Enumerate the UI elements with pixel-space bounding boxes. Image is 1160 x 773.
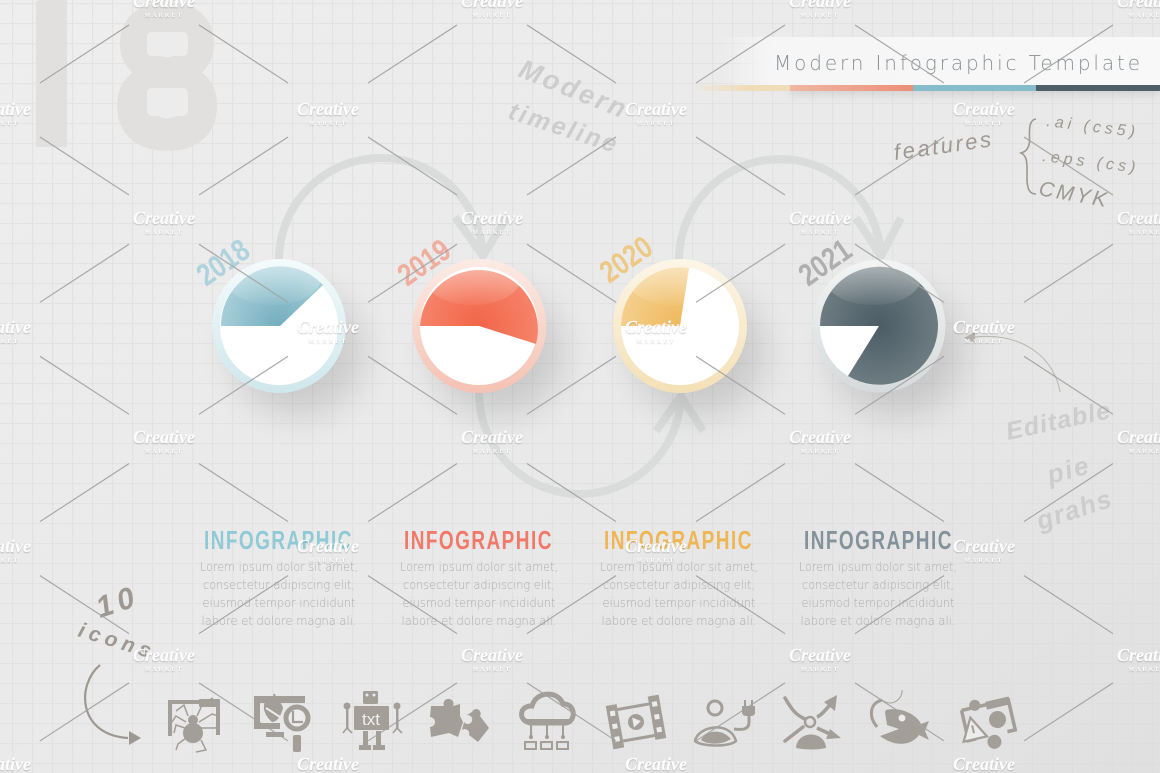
- watermark logos: MARKET: [472, 667, 512, 673]
- text block 2021: consectetur adipiscing elit,: [802, 578, 954, 592]
- watermark logos: MARKET: [964, 558, 1004, 564]
- handwritten note: features: [892, 113, 1140, 212]
- year label 2019: 2019: [391, 232, 457, 293]
- watermark logos: Creative: [625, 536, 687, 556]
- watermark logos: Creative: [625, 99, 687, 119]
- icon: person with plug: [695, 700, 755, 746]
- watermark logos: MARKET: [636, 558, 676, 564]
- handwritten note: modern timeline: [505, 54, 633, 159]
- text block 2020: Lorem ipsum dolor sit amet,: [600, 560, 758, 574]
- text block 2018: consectetur adipiscing elit,: [203, 578, 355, 592]
- watermark logos: MARKET: [144, 13, 184, 19]
- arrow: 2019 to 2020: [479, 392, 703, 494]
- curved arrows linking the timeline: [279, 158, 901, 494]
- watermark logos: MARKET: [308, 558, 348, 564]
- handwritten note: 10 icons: 10: [92, 580, 143, 625]
- text block 2018: Lorem ipsum dolor sit amet,: [200, 560, 358, 574]
- watermark logos: Creative: [461, 645, 523, 665]
- text block 2018: eiusmod tempor incididunt: [202, 596, 356, 610]
- icon: puzzle pieces: [430, 699, 489, 742]
- handwritten note: modern timeline: Modern: [515, 54, 633, 125]
- icon: film strip: [605, 695, 667, 749]
- icon: cloud network: [522, 694, 573, 749]
- icon: txt robot: txt: [362, 710, 380, 729]
- watermark logos: Creative: [953, 536, 1015, 556]
- watermark logos: MARKET: [800, 667, 840, 673]
- year label 2020: 2020: [593, 229, 659, 290]
- banner title: Modern Infographic Template: [774, 51, 1140, 75]
- watermark logos: MARKET: [144, 667, 184, 673]
- watermark logos: Creative: [789, 645, 851, 665]
- text block 2020: consectetur adipiscing elit,: [603, 578, 755, 592]
- text block 2021: labore et dolore magna ali.: [800, 614, 956, 628]
- handwritten note: modern timeline: timeline: [505, 97, 623, 159]
- text block 2021: [799, 525, 957, 628]
- banner colour bar: [690, 85, 1160, 91]
- title banner: [690, 37, 1160, 93]
- handwritten note: features: .ai (cs5): [1046, 113, 1140, 141]
- icon: txt robot: [343, 691, 402, 750]
- text block 2020: eiusmod tempor incididunt: [602, 596, 756, 610]
- curved arrow to icons: [85, 665, 141, 745]
- watermark logos: MARKET: [308, 121, 348, 127]
- text block 2018: labore et dolore magna ali.: [202, 614, 356, 628]
- text block 2018: INFOGRAPHIC: [204, 525, 353, 555]
- text block 2019: [400, 525, 558, 628]
- watermark logos: Creative: [789, 208, 851, 228]
- text block 2018: [200, 525, 358, 628]
- watermark logos: Creative: [953, 317, 1015, 337]
- watermark logos: Creative: [625, 317, 687, 337]
- text block 2019: Lorem ipsum dolor sit amet,: [400, 560, 558, 574]
- text block 2020: [600, 525, 758, 628]
- icon: spider on window: [168, 698, 220, 752]
- text block 2019: INFOGRAPHIC: [404, 525, 553, 555]
- icon: decision arrows: [785, 695, 841, 750]
- watermark logos: Creative: [133, 645, 195, 665]
- watermark logos: Creative: [953, 99, 1015, 119]
- text block 2019: labore et dolore magna ali.: [402, 614, 556, 628]
- year label 2018: 2018: [190, 232, 256, 293]
- watermark logos: MARKET: [800, 449, 840, 455]
- text block 2019: consectetur adipiscing elit,: [403, 578, 555, 592]
- text block 2021: INFOGRAPHIC: [804, 525, 953, 555]
- icon: fish with hook: [871, 690, 929, 744]
- watermark logos: Creative: [789, 427, 851, 447]
- pie: 2021: [812, 251, 964, 416]
- watermark logos: Creative: [461, 427, 523, 447]
- watermark logos: Creative: [297, 536, 359, 556]
- watermark logos: MARKET: [472, 230, 512, 236]
- icon row: [168, 690, 1019, 755]
- pointer arrow to 2021 pie: [964, 332, 1060, 392]
- watermark logos: MARKET: [964, 339, 1004, 345]
- text block 2020: INFOGRAPHIC: [604, 525, 753, 555]
- watermark logos: Creative: [133, 208, 195, 228]
- watermark logos: MARKET: [964, 121, 1004, 127]
- watermark logos: MARKET: [800, 230, 840, 236]
- text block 2021: Lorem ipsum dolor sit amet,: [799, 560, 957, 574]
- handwritten note: editable pie graphs: Editable: [1003, 396, 1114, 446]
- handwritten note: features: CMYK: [1037, 177, 1111, 212]
- handwritten note: features: features: [892, 126, 995, 165]
- watermark logos: MARKET: [472, 13, 512, 19]
- handwritten note: features: .eps (cs): [1042, 148, 1140, 177]
- pie: 2020: [613, 251, 765, 416]
- brace: [1021, 119, 1036, 194]
- watermark logos: Creative: [461, 208, 523, 228]
- pie: 2019: [412, 251, 564, 416]
- watermark logos: Creative: [133, 427, 195, 447]
- handwritten note: 10 icons: [76, 580, 159, 745]
- watermark logos: MARKET: [308, 339, 348, 345]
- handwritten note: editable pie graphs: grahs: [1032, 483, 1116, 536]
- watermark logos: Creative: [297, 317, 359, 337]
- icon: window with warning: [955, 692, 1019, 755]
- handwritten note: editable pie graphs: [1003, 396, 1116, 536]
- icon: virus scan monitor: [254, 694, 308, 752]
- watermark logos: MARKET: [636, 121, 676, 127]
- text block 2020: labore et dolore magna ali.: [602, 614, 756, 628]
- arrow: 2018 to 2019: [279, 158, 507, 262]
- year label 2021: 2021: [792, 232, 858, 293]
- handwritten note: 10 icons: icons: [76, 619, 159, 664]
- handwritten note: editable pie graphs: pie: [1043, 450, 1094, 490]
- watermark logos: MARKET: [800, 13, 840, 19]
- watermark logos: Creative: [297, 99, 359, 119]
- watermark logos: MARKET: [472, 449, 512, 455]
- big year number: [36, 0, 217, 151]
- pie: 2018: [212, 251, 364, 416]
- watermark logos: MARKET: [144, 449, 184, 455]
- watermark logos: MARKET: [636, 339, 676, 345]
- text block 2021: eiusmod tempor incididunt: [802, 596, 955, 610]
- text block 2019: eiusmod tempor incididunt: [402, 596, 556, 610]
- watermark logos: MARKET: [144, 230, 184, 236]
- arrow: 2020 to 2021: [679, 159, 901, 262]
